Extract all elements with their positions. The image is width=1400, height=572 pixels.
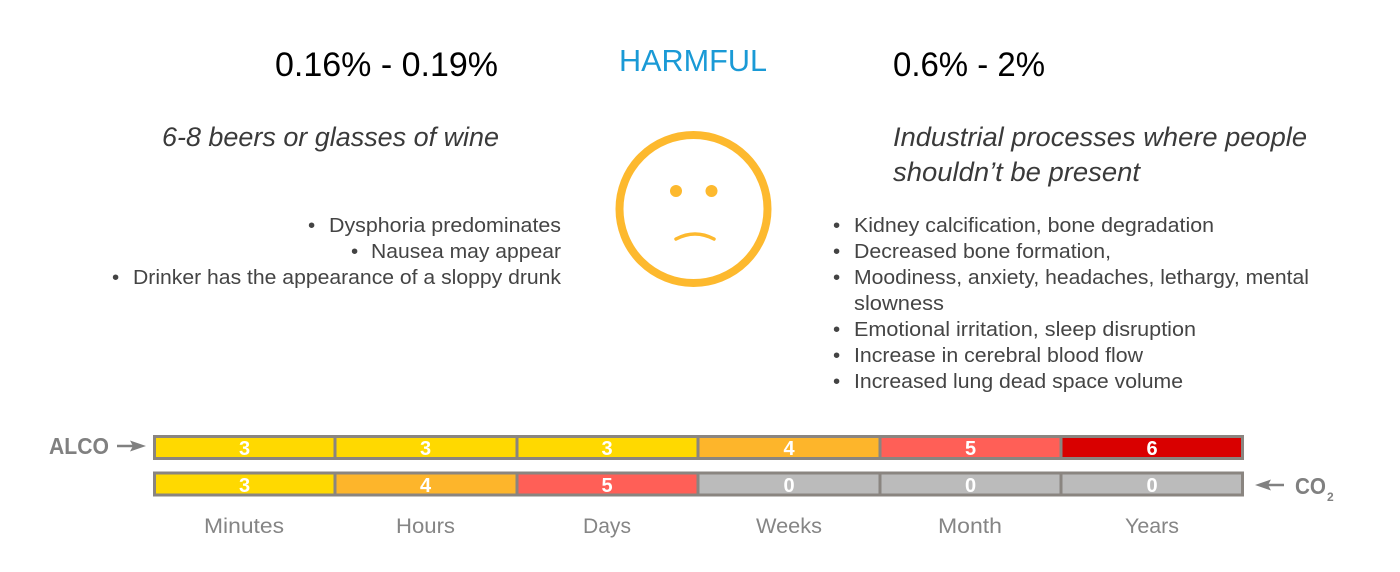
bar: ALCO timeline: 4 [783, 438, 795, 460]
bar: ALCO timeline: 6 [1146, 438, 1158, 460]
list: CO2 effects: • [833, 240, 840, 263]
bar: CO2 timeline: 0 [783, 475, 795, 497]
list: CO2 effects: • [833, 214, 840, 237]
bar: ALCO timeline: 3 [239, 438, 250, 460]
axis labels: time scale: Days [583, 515, 631, 538]
axis labels: time scale: Years [1125, 515, 1179, 538]
axis labels: time scale: Weeks [756, 515, 822, 538]
list: CO2 effects: • [833, 344, 840, 367]
list: alcohol effects: Dysphoria predominates [329, 214, 561, 237]
list: alcohol effects [112, 214, 562, 289]
label: CO2 with arrow [1255, 473, 1334, 504]
list: CO2 effects: • [833, 318, 840, 341]
list: CO2 effects: Kidney calcification, bone degradation [854, 214, 1214, 237]
list: CO2 effects: slowness [854, 292, 944, 315]
text: CO2 setting [893, 122, 1307, 187]
label: ALCO with arrow [49, 433, 146, 459]
bar: CO2 timeline: 5 [601, 475, 613, 497]
label: CO2 with arrow: CO [1295, 473, 1326, 499]
bar: ALCO timeline [154, 436, 1242, 460]
list: alcohol effects: • [351, 240, 358, 263]
list: CO2 effects: • [833, 370, 840, 393]
heading: CO2 percentage: 0.6% - 2% [893, 46, 1045, 84]
heading: alcohol percentage: 0.16% - 0.19% [275, 46, 498, 84]
list: alcohol effects: Drinker has the appearance of a sloppy drunk [133, 266, 562, 289]
axis labels: time scale: Hours [396, 515, 455, 538]
text: CO2 setting: shouldn’t be present [893, 157, 1142, 187]
list: CO2 effects: Moodiness, anxiety, headaches, lethargy, mental [854, 266, 1309, 289]
panel: alcohol column [112, 46, 562, 289]
axis labels: time scale: Month [938, 515, 1002, 538]
list: CO2 effects: • [833, 266, 840, 289]
bar: CO2 timeline [154, 472, 1242, 497]
list: CO2 effects: Increased lung dead space volume [854, 370, 1183, 393]
label: ALCO with arrow: ALCO [49, 433, 109, 459]
axis labels: time scale: Minutes [204, 515, 284, 538]
bar: ALCO timeline: 3 [420, 438, 431, 460]
bar: CO2 timeline: 0 [965, 475, 976, 497]
list: alcohol effects: • [112, 266, 119, 289]
panel: CO2 column [833, 46, 1309, 393]
bar: CO2 timeline: 4 [420, 475, 432, 497]
text: alcohol amount: 6-8 beers or glasses of wine [162, 122, 499, 152]
list: CO2 effects: Decreased bone formation, [854, 240, 1111, 263]
list: CO2 effects: Increase in cerebral blood flow [854, 344, 1143, 367]
heading: harmful: HARMFUL [619, 43, 767, 78]
axis labels: time scale [204, 515, 1179, 538]
icon: sad face [620, 135, 768, 283]
list: alcohol effects: Nausea may appear [371, 240, 561, 263]
label: CO2 with arrow: 2 [1327, 490, 1334, 504]
text: CO2 setting: Industrial processes where people [893, 122, 1307, 152]
bar: ALCO timeline: 5 [965, 438, 976, 460]
list: CO2 effects [833, 214, 1309, 393]
bar: ALCO timeline: 3 [601, 438, 613, 460]
bar: CO2 timeline: 3 [239, 475, 250, 497]
list: alcohol effects: • [308, 214, 315, 237]
bar: CO2 timeline: 0 [1146, 475, 1158, 497]
list: CO2 effects: Emotional irritation, sleep disruption [854, 318, 1196, 341]
